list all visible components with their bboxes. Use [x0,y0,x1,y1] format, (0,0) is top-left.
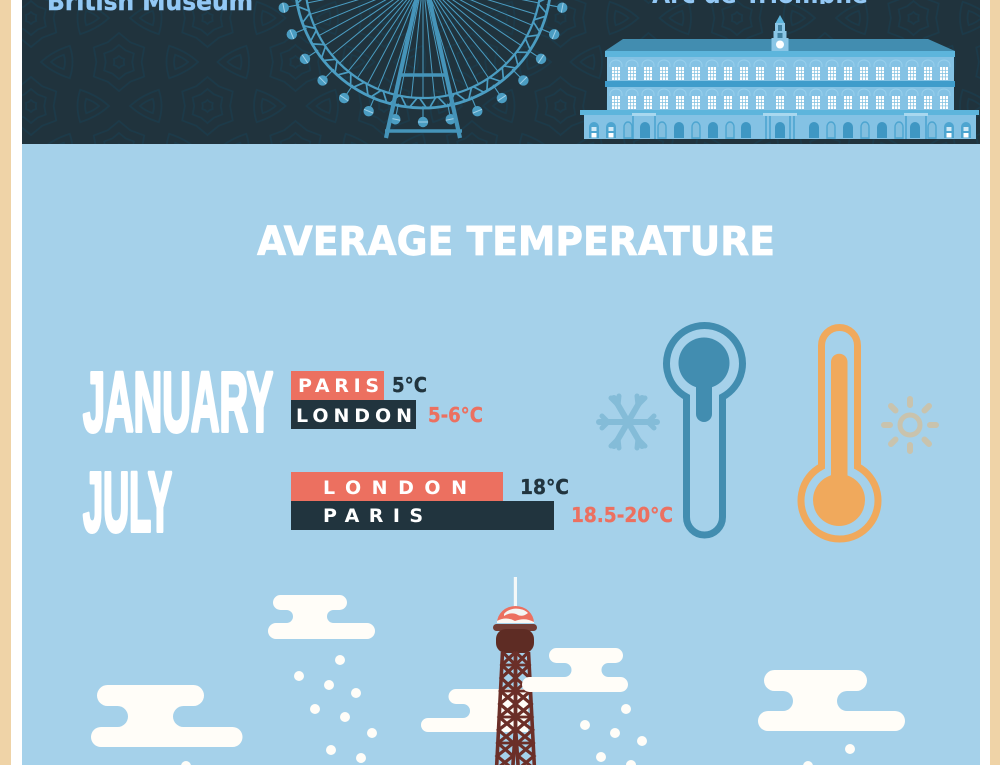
bar: Paris July [291,501,554,530]
January bars: PARIS [298,375,379,397]
infographic canvas: JANUARY [83,355,273,449]
cloud: behind tower [421,689,528,732]
January bars [291,371,483,429]
ground floor arcade [584,115,976,139]
January bars: 5°C [392,373,427,397]
icon: warm thermometer [801,328,878,539]
illustration: Eiffel Tower [493,577,537,765]
July bars: 18°C [520,475,569,499]
dark landmarks banner [22,0,980,144]
cloud: top left [268,595,375,639]
light blue temperature panel [22,143,980,765]
cloud: right [758,670,905,731]
upper floors [607,57,954,111]
bar: Paris January [291,371,384,400]
illustration: palace building [580,15,979,139]
antenna [514,577,517,608]
infographic canvas: JULY [83,455,172,549]
upper sphere [496,629,534,653]
icon: sun [884,399,936,451]
icon: cold thermometer [666,326,742,535]
platform [493,624,537,631]
lattice legs [496,652,535,765]
heading: AVERAGE TEMPERATURE [257,219,775,265]
snow: middle [580,704,647,765]
left leg [496,652,516,765]
illustration: London Eye [278,0,568,138]
January bars: LONDON [296,405,412,427]
January bars: 5-6°C [428,403,483,427]
July bars: 18.5-20°C [571,503,673,527]
snow: left [181,655,377,765]
snow: right [803,744,855,765]
clock tower [772,15,788,51]
cloud: in front of tower [522,648,628,692]
July bars: LONDON [323,477,467,499]
July bars [291,472,673,530]
cloud: bottom left [91,685,242,747]
July bars: PARIS [323,505,423,527]
bar: London July [291,472,503,501]
icon: snowflake [599,396,657,448]
bar: London January [291,400,416,429]
dome [497,606,534,623]
right leg [516,652,535,765]
roof [605,39,955,51]
